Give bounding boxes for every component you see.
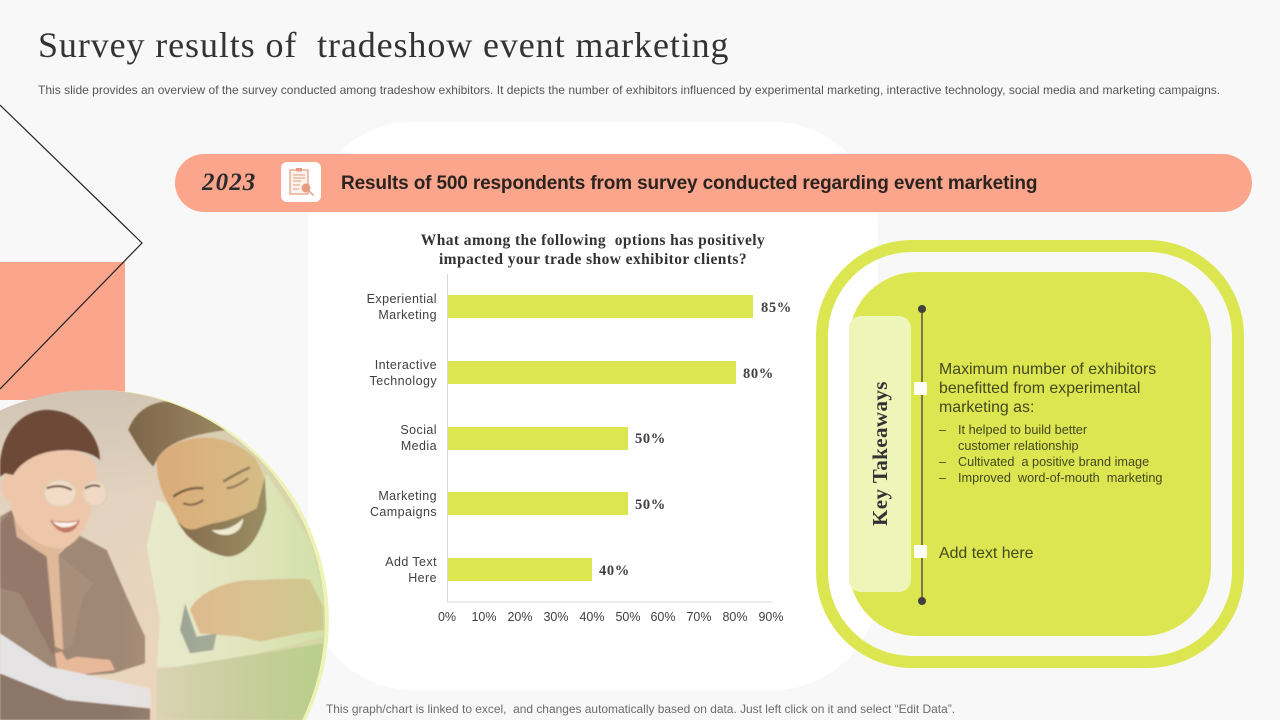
banner heading: Results of 500 respondents from survey conducted regarding event marketing (341, 173, 1037, 194)
panel: key takeaways inner card (849, 272, 1211, 636)
bar: Marketing Campaigns: Marketing (378, 489, 437, 503)
chart question heading: What among the following options has positively (421, 232, 765, 249)
icon: clipboard with magnifier (281, 162, 321, 202)
bar: Social Media: Social (400, 423, 437, 437)
x axis labels (438, 610, 784, 624)
bar: Social Media: Media (401, 438, 437, 452)
chart axes (447, 274, 772, 602)
key takeaways label tab (849, 316, 911, 592)
takeaway text one: Cultivated a positive brand image (958, 455, 1149, 469)
title: Survey results of tradeshow event marketing (38, 25, 729, 65)
x axis labels: 20% (507, 610, 533, 624)
vertical label: Key Takeaways (868, 382, 892, 526)
bar: Interactive Technology (370, 358, 774, 388)
x axis labels: 70% (686, 610, 712, 624)
year label: 2023 (202, 169, 256, 196)
x axis labels: 30% (543, 610, 569, 624)
chart question heading (420, 232, 765, 268)
bar chart (367, 274, 792, 624)
bar: Social Media (400, 423, 666, 452)
bar: Experiential Marketing (367, 292, 792, 322)
x axis labels: 10% (471, 610, 497, 624)
takeaway text two: Add text here (939, 545, 1034, 562)
bar: Interactive Technology: Technology (370, 374, 437, 388)
bar: Add Text Here: Here (408, 570, 437, 584)
banner: survey results (175, 154, 1252, 212)
chart question heading: impacted your trade show exhibitor clients? (439, 251, 747, 268)
bar: Marketing Campaigns: Campaigns (370, 504, 437, 518)
bar: Social Media: 50% (635, 431, 666, 447)
bar: Experiential Marketing: Marketing (378, 308, 437, 322)
photo: two colleagues in circular crop (0, 390, 329, 720)
bar: Interactive Technology: 80% (743, 366, 774, 382)
bar: Add Text Here: Add Text (385, 555, 437, 569)
bar: Add Text Here (385, 555, 630, 584)
takeaway text one: – (939, 471, 946, 485)
subtitle description: This slide provides an overview of the survey conducted among tradeshow exhibitors. It depicts the number of exhibitors influenced by experimental marketing, interactive technology, social media and marketing campaigns. (38, 83, 1220, 97)
takeaway text one: – (939, 423, 946, 437)
panel: key takeaways ring (816, 240, 1244, 668)
takeaway text one: customer relationship (958, 439, 1079, 453)
panel: white rounded chart background (308, 122, 878, 690)
x axis labels: 40% (579, 610, 605, 624)
x axis labels: 50% (615, 610, 641, 624)
x axis labels: 90% (758, 610, 784, 624)
x axis labels: 80% (722, 610, 748, 624)
timeline (914, 305, 927, 605)
bar: Experiential Marketing: Experiential (367, 292, 437, 306)
bar: Experiential Marketing: 85% (761, 300, 792, 316)
takeaway text one (939, 361, 1162, 485)
x axis labels: 60% (650, 610, 676, 624)
decorative corner graphic (0, 104, 143, 400)
takeaway text one: benefitted from experimental (939, 380, 1140, 397)
bar: Marketing Campaigns (370, 489, 666, 518)
takeaway text one: Maximum number of exhibitors (939, 361, 1156, 378)
bar: Marketing Campaigns: 50% (635, 497, 666, 513)
bar: Interactive Technology: Interactive (375, 358, 437, 372)
takeaway text one: It helped to build better (958, 423, 1087, 437)
bar: Add Text Here: 40% (599, 563, 630, 579)
takeaway text one: Improved word-of-mouth marketing (958, 471, 1162, 485)
takeaway text one: – (939, 455, 946, 469)
takeaway text one: marketing as: (939, 399, 1034, 416)
footnote: This graph/chart is linked to excel, and changes automatically based on data. Just left click on it and select “Edit Data”. (326, 702, 955, 716)
x axis labels: 0% (438, 610, 456, 624)
